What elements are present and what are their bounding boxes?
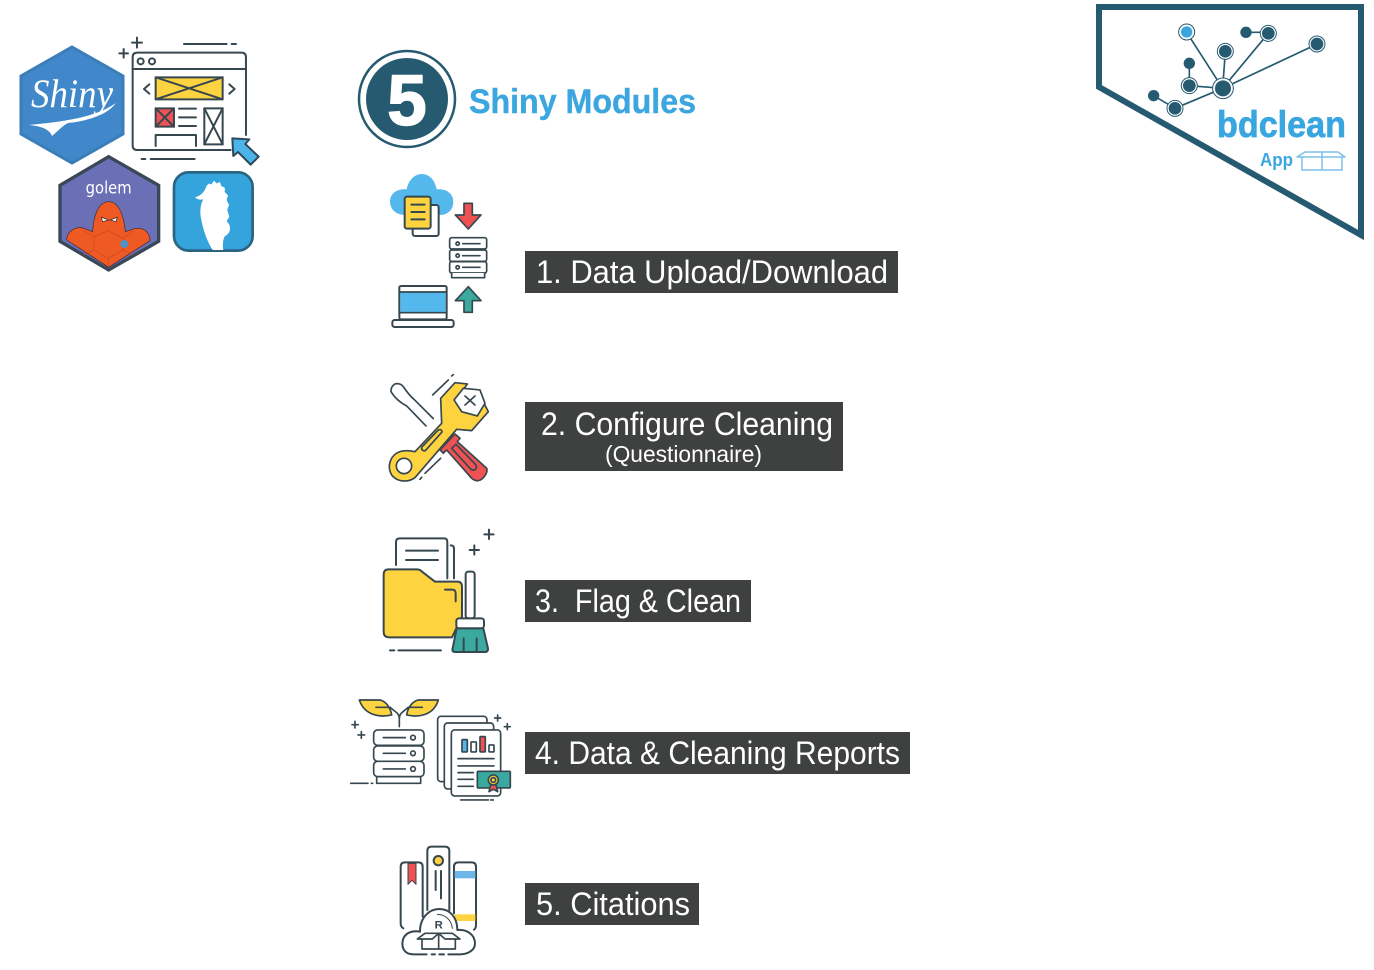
icon: books and R package cloud — [401, 847, 476, 954]
label: 2. Configure Cleaning: 2. Configure Cleaning — [541, 406, 833, 442]
icon: number 5 badge — [359, 51, 455, 147]
icon: books and R package cloud: R — [435, 919, 443, 931]
icon: server plant and reports — [351, 700, 510, 800]
icon: Shiny hex logo — [21, 47, 123, 163]
label: 2. Configure Cleaning: (Questionnaire) — [605, 441, 762, 467]
label: 5. Citations: 5. Citations — [536, 886, 690, 922]
logo: bdclean app: App — [1260, 150, 1293, 170]
icon: data upload and download — [390, 174, 487, 327]
icon: golem hex logo — [60, 157, 159, 270]
icon: number 5 badge: 5 — [387, 62, 427, 141]
logo: bdclean app: bdclean — [1217, 104, 1346, 145]
label: 1. Data Upload/Download: 1. Data Upload/Download — [536, 254, 888, 290]
label: 2. Configure Cleaning — [525, 402, 843, 471]
icon: browser wireframe — [119, 38, 259, 165]
icon: folder and broom — [384, 530, 494, 652]
logo: bdclean app — [1099, 7, 1361, 235]
icon: seahorse square logo — [174, 172, 253, 251]
icon: golem hex logo: golem — [86, 178, 132, 197]
heading: Shiny Modules: Shiny Modules — [469, 83, 696, 121]
label: 3. Flag & Clean: 3. Flag & Clean — [535, 583, 741, 619]
label: 4. Data & Cleaning Reports: 4. Data & Cleaning Reports — [535, 735, 900, 771]
icon: wrench, screwdriver and hammer — [389, 375, 488, 481]
icon: Shiny hex logo: Shiny — [31, 71, 113, 116]
